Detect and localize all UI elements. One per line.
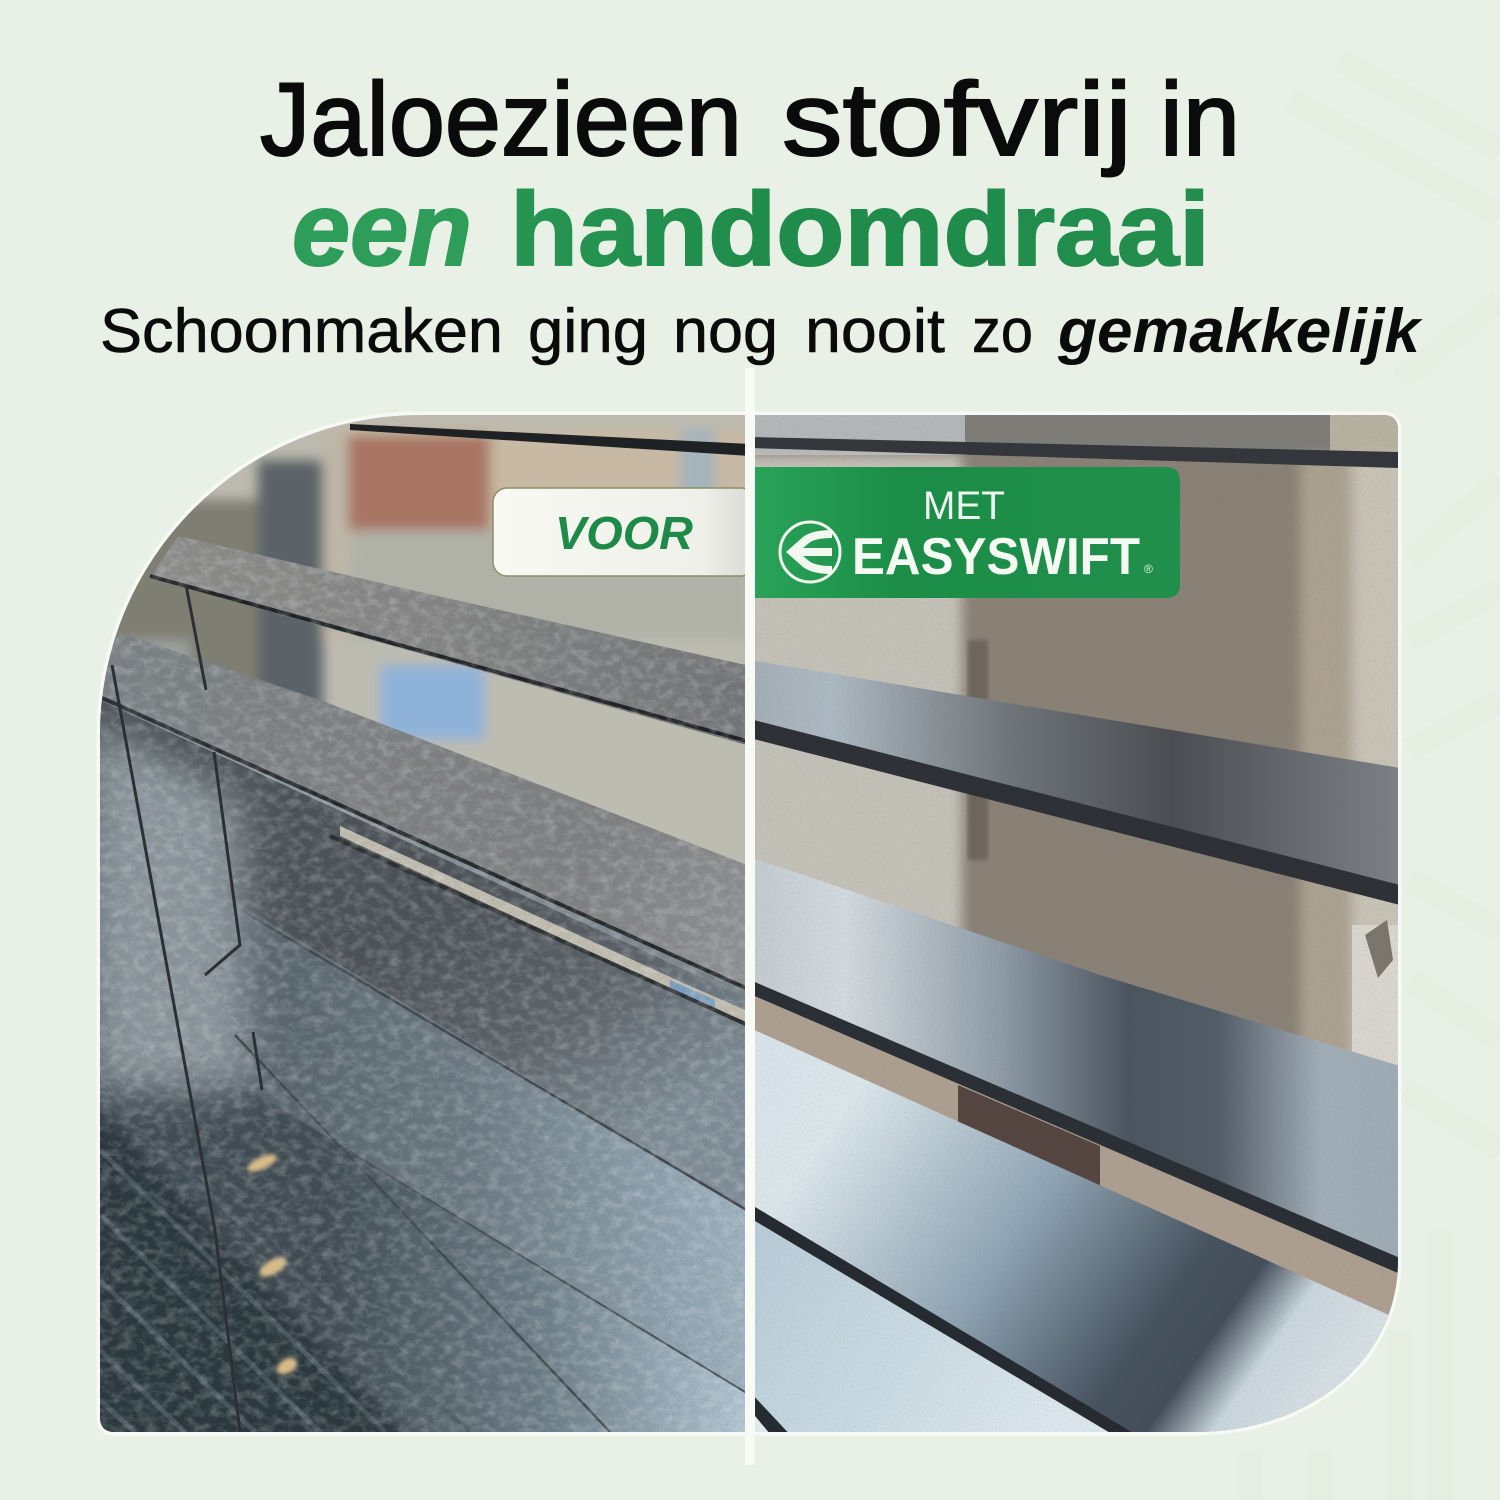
subtitle: nooit: [805, 297, 945, 366]
slat: top bar: [350, 424, 750, 456]
label: met easyswift: [750, 467, 1180, 598]
title: stofvrij: [782, 62, 1132, 178]
subtitle: [100, 297, 1424, 366]
panel: before and after photo: [90, 410, 1412, 1450]
left column of far slats: [90, 720, 610, 1450]
slat: fourth clean slat: [750, 1218, 1122, 1440]
subtitle: ging: [528, 297, 648, 366]
wall below second slat: [750, 994, 1400, 1330]
lower wall of blinds: [100, 700, 750, 1440]
label: voor: VOOR: [555, 507, 693, 559]
slat: third dusty slat: [100, 700, 750, 1212]
subtitle: Schoonmaken: [100, 297, 503, 366]
slat: first dusty slat: [150, 536, 750, 746]
window detail right: [1352, 920, 1400, 1065]
title: in: [1160, 62, 1240, 178]
reflections on slats: [245, 1151, 300, 1378]
panel: met easyswift side, clean blinds: [740, 410, 1412, 1440]
divider line: [745, 368, 755, 1465]
title: Jaloezieen: [260, 62, 742, 178]
slat: third clean slat: [750, 1028, 1400, 1440]
subtitle: nog: [673, 297, 778, 366]
slat: second dusty slat: [100, 636, 750, 992]
title: een: [292, 172, 472, 288]
subtitle: zo: [972, 297, 1033, 366]
panel: voor side, dusty blinds: [90, 410, 760, 1450]
slat: second clean slat: [750, 857, 1400, 1274]
label: met easyswift: MET: [923, 484, 1005, 528]
label: met easyswift: ®: [1144, 562, 1153, 576]
title: handomdraai: [510, 172, 1210, 288]
title: [260, 62, 1240, 288]
icon: easyswift logo: [780, 522, 840, 582]
slat: fifth dusty slat: [100, 1000, 750, 1440]
slat: fourth dusty slat: [100, 820, 750, 1395]
cords: [112, 585, 262, 1432]
label: voor: [493, 488, 755, 576]
slat: first clean slat: [750, 660, 1400, 905]
subtitle: gemakkelijk: [1057, 297, 1424, 366]
slat: clean top bar: [750, 437, 1400, 468]
dust texture: [100, 500, 750, 1440]
label: met easyswift: EASYSWIFT: [852, 528, 1140, 586]
